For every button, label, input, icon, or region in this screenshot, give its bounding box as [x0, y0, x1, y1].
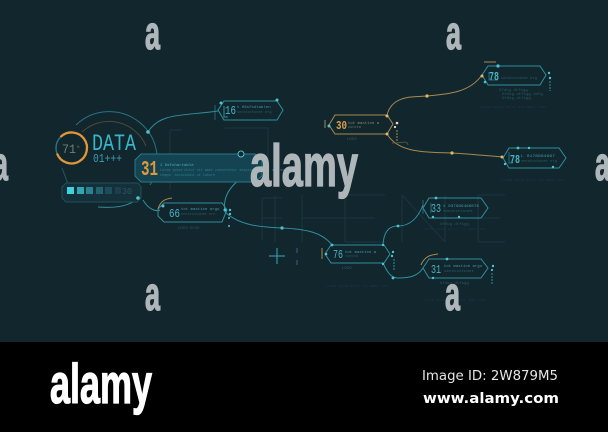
node: 30: tot mastice a	[348, 121, 380, 126]
node: 30: LOCO	[347, 138, 357, 142]
node: 33: Lorem ipsum dolor sit amet cons	[424, 227, 486, 232]
node: 78 top	[480, 62, 551, 110]
caption under 78 top: Gfdkg dtfsgg	[499, 88, 528, 93]
node: 78 top: secstcctunet erg	[501, 76, 537, 81]
node: 76: tot mastice a	[345, 250, 377, 255]
watermarks: a	[145, 6, 160, 59]
outer ring	[76, 112, 157, 185]
node: 76: cuncta	[345, 255, 359, 259]
node: 78 bottom	[500, 147, 566, 183]
node: 78 bottom: secstcctunet erg	[521, 159, 557, 164]
node: 78 bottom: Lorem ipsum dolor sit amet cons	[502, 178, 564, 183]
DATA heading: DATA	[92, 131, 136, 157]
watermarks: a	[446, 6, 461, 59]
panel: highlight 31: Lorem ipsum dolor sit amet consectetur adipiscing elit sed do eiusmod	[160, 168, 300, 173]
panel: highlight 31: 31	[141, 159, 158, 182]
node: 31	[421, 254, 494, 303]
watermarks: alamy	[250, 133, 358, 199]
node: 16: secstcctunet erg	[237, 110, 272, 115]
panel: highlight 31: tempor incididunt ut labore	[160, 173, 215, 178]
caption under 78 top: Gfdkg dtfsgg ddfg	[502, 92, 543, 97]
faint background lettering	[170, 128, 505, 242]
node: 76: Lorem ipsum dolor sit amet cons	[326, 284, 388, 289]
watermarks: a	[445, 267, 460, 320]
node: 33	[423, 197, 488, 232]
node: 31: Lorem ipsum dolor sit amet cons	[424, 298, 486, 303]
footer logo: alamy	[50, 352, 152, 415]
progress bar panel: 30	[122, 187, 132, 197]
circular gauge 71 percent	[56, 132, 87, 164]
image id: Image ID: 2W879M5	[422, 368, 558, 384]
caption under 78 top	[480, 88, 547, 110]
node: 66: tot mastice argu	[181, 207, 220, 212]
node: 16	[215, 98, 283, 120]
node: 33: 33	[431, 202, 441, 216]
node: 66: secstcctunet ern	[181, 212, 216, 217]
background	[0, 0, 608, 342]
node: 66: 66	[169, 207, 180, 221]
node: 76: 76	[333, 248, 343, 262]
node: 30: 30	[336, 119, 347, 133]
node: 78 bottom: L 0178864667	[521, 155, 556, 159]
node: 31: tot mastice argu	[444, 264, 483, 269]
panel: highlight 31: 1 Defchartable	[160, 163, 194, 168]
icon: crosshair	[269, 248, 297, 265]
caption under 78 top: Lorem ipsum dolor sit amet cons	[480, 105, 547, 110]
circular gauge 71 percent: 71	[62, 142, 76, 157]
node: 33: secstcctunet	[443, 210, 473, 214]
node: 33: Gfdkg dtfsgg	[440, 222, 469, 227]
watermarks	[0, 6, 608, 320]
circular gauge 71 percent: %	[77, 146, 80, 150]
node: 78 top: 78	[489, 70, 499, 84]
data code: 01+++	[93, 152, 122, 166]
node: 78 bottom: 78	[510, 153, 520, 167]
node: 16: 16	[225, 104, 236, 118]
node: 31: secstcctunet	[444, 270, 474, 274]
node: 66	[158, 198, 231, 231]
main gauge: data hub	[56, 112, 157, 185]
watermarks: a	[145, 267, 160, 320]
node: 16: t 06sfsdtablen	[237, 105, 271, 110]
website: www.alamy.com	[423, 391, 559, 407]
panel: highlight 31	[135, 151, 300, 182]
node: 30: cuncta	[348, 126, 362, 130]
node: 76	[322, 244, 394, 289]
node: 33: t 037986466076	[443, 205, 480, 209]
node: 66: LOCO DCUE	[178, 227, 200, 231]
node: 31: Gfdkg dtfsgg	[440, 281, 469, 286]
progress bar panel	[62, 183, 141, 202]
node: 31: 31	[431, 263, 441, 277]
node: 30	[325, 114, 398, 142]
connector nodes	[136, 94, 454, 279]
caption under 78 top: Gfdkg dtfsgg	[502, 96, 531, 101]
connector lines	[98, 75, 503, 278]
footer bar	[0, 342, 608, 432]
node: 76: LOCO	[342, 267, 352, 271]
